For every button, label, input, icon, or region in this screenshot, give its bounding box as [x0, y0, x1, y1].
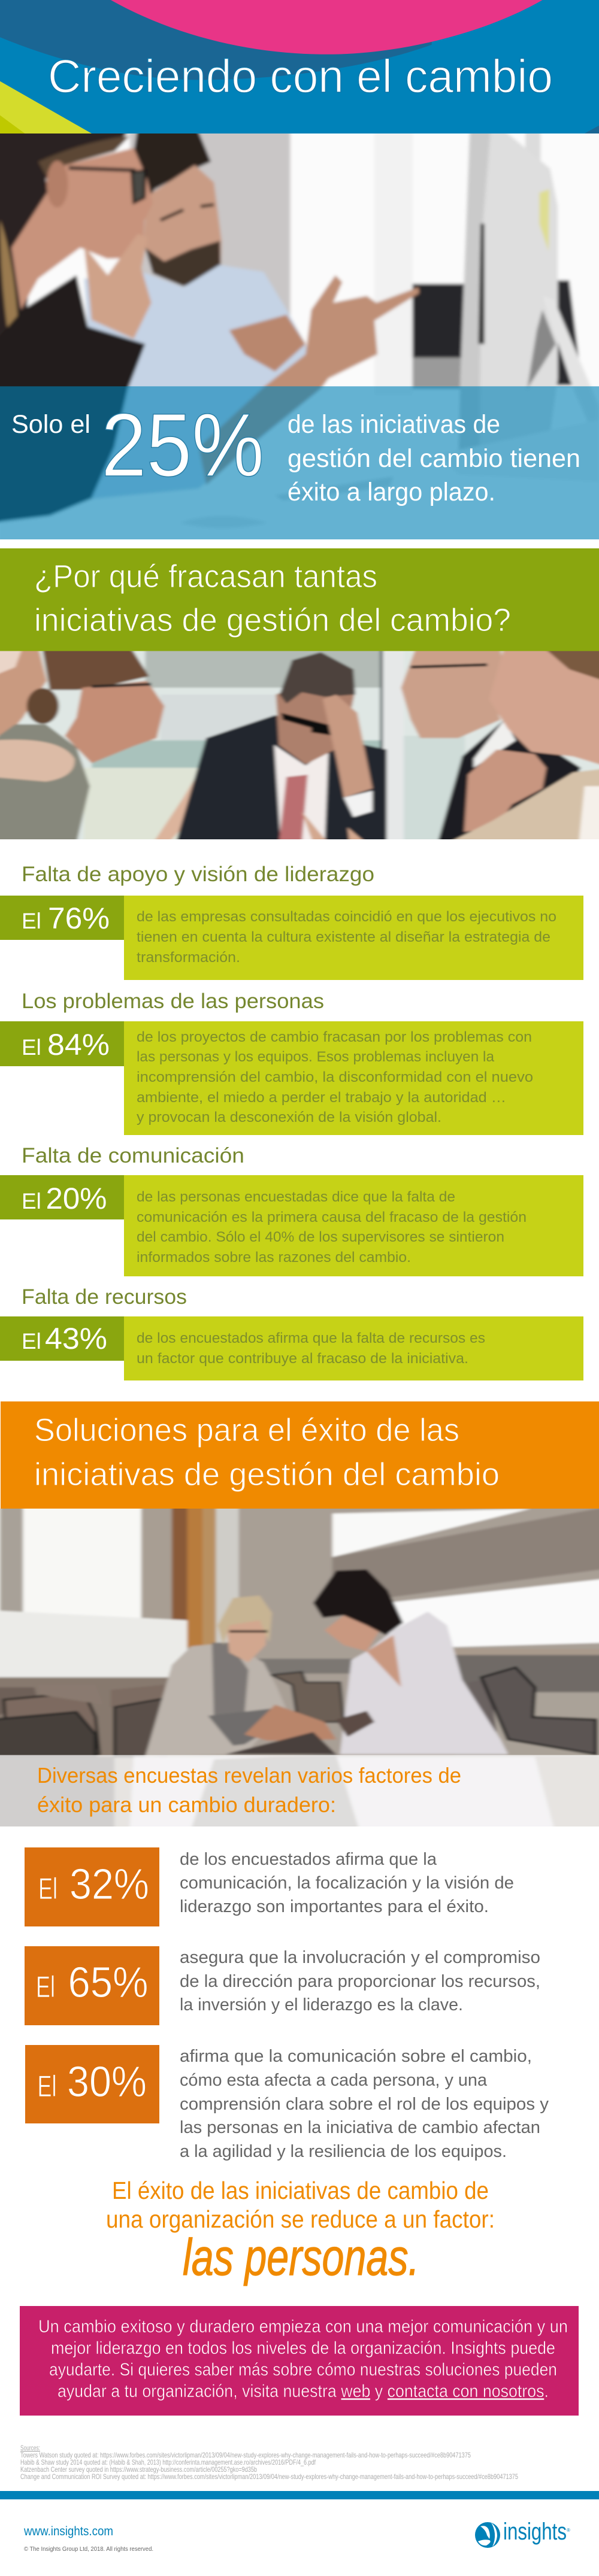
item: falta de comunicación: comunicación es la primera causa del fracaso de la gestión	[137, 1209, 527, 1225]
heading band: por qué fracasan: ¿Por qué fracasan tantas	[34, 559, 377, 594]
stat: 32%: de los encuestados afirma que la	[180, 1850, 437, 1869]
statistic: solo el 25%: de las iniciativas de	[288, 410, 500, 439]
conclusion statement	[106, 2177, 495, 2286]
item: problemas de las personas: de los proyectos de cambio fracasan por los problemas con	[137, 1029, 532, 1045]
item: falta de apoyo: tienen en cuenta la cultura existente al diseñar la estrategia de	[137, 929, 550, 945]
stat: 30%: comprensión clara sobre el rol de los equipos y	[180, 2095, 549, 2114]
item: falta de comunicación: de las personas encuestadas dice que la falta de	[137, 1189, 455, 1205]
stat: 30%	[25, 2045, 549, 2161]
item: falta de comunicación: El	[22, 1189, 41, 1213]
stat: 32%: liderazgo son importantes para el éxito.	[180, 1897, 489, 1916]
statistic: solo el 25%: éxito a largo plazo.	[288, 478, 495, 506]
footer website and copyright	[23, 2525, 153, 2553]
item: problemas de las personas: y provocan la desconexión de la visión global.	[137, 1109, 441, 1125]
item: falta de comunicación: 20%	[46, 1182, 107, 1215]
stat: 65%	[25, 1946, 540, 2025]
item: problemas de las personas: las personas y los equipos. Esos problemas incluyen la	[137, 1049, 495, 1065]
item: falta de comunicación: Falta de comunicación	[22, 1144, 244, 1167]
heading band: por qué fracasan: iniciativas de gestión del cambio?	[34, 602, 511, 638]
item: falta de apoyo: de las empresas consultadas coincidió en que los ejecutivos no	[137, 909, 556, 925]
item: falta de recursos: Falta de recursos	[22, 1285, 187, 1309]
stat: 65%: 65%	[68, 1959, 149, 2007]
footer website and copyright: © The Insights Group Ltd, 2018. All rights reserved.	[24, 2545, 153, 2553]
item: problemas de las personas: 84%	[47, 1028, 110, 1061]
item: falta de recursos	[0, 1285, 583, 1380]
photo: two women with a tablet in an auditorium	[0, 1504, 599, 1831]
stat: 65%: la inversión y el liderazgo es la clave.	[180, 1995, 463, 2014]
heading band: soluciones: Soluciones para el éxito de las	[34, 1412, 459, 1448]
call to action panel	[20, 2306, 579, 2416]
heading band: soluciones	[1, 1401, 599, 1509]
subheading over photo: Diversas encuestas revelan varios factores de	[37, 1763, 461, 1788]
sources	[20, 2444, 518, 2481]
item: falta de recursos: un factor que contribuye al fracaso de la iniciativa.	[137, 1351, 468, 1367]
item: falta de comunicación	[0, 1144, 583, 1276]
insights logo: insights	[503, 2519, 567, 2545]
stat: 30%: cómo esta afecta a cada persona, y una	[180, 2071, 488, 2090]
conclusion statement: una organización se reduce a un factor:	[106, 2205, 495, 2233]
handwritten emphasis: las personas.	[183, 2229, 419, 2286]
stat: 65%: asegura que la involucración y el compromiso	[180, 1948, 540, 1967]
photo: two colleagues at a monitor with statistic overlay	[0, 128, 599, 544]
sources: Sources:	[20, 2444, 40, 2452]
item: falta de recursos: El	[22, 1329, 41, 1354]
call to action panel: ayudar a tu organización, visita nuestra web y contacta con nosotros.	[58, 2381, 549, 2401]
stat: 32%: comunicación, la focalización y la visión de	[180, 1874, 514, 1893]
statistic: solo el 25%: gestión del cambio tienen	[288, 444, 580, 473]
call to action panel: mejor liderazgo en todos los niveles de la organización. Insights puede	[51, 2338, 555, 2358]
statistic: solo el 25%	[11, 395, 580, 506]
stat: 32%	[25, 1847, 514, 1926]
statistic: solo el 25%: Solo el	[11, 410, 90, 439]
heading band: por qué fracasan	[0, 548, 599, 651]
item: falta de apoyo: Falta de apoyo y visión de liderazgo	[22, 863, 374, 886]
sources: Katzenbach Center survey quoted in https://www.strategy-business.com/article/00255?gko=9d35b	[20, 2465, 257, 2474]
stat: 32%: El	[38, 1872, 58, 1906]
subheading over photo: éxito para un cambio duradero:	[37, 1792, 336, 1817]
stat: 30%: El	[37, 2070, 56, 2103]
stat: 32%: 32%	[69, 1861, 149, 1909]
photo: tense business meeting	[0, 647, 599, 844]
icon: logo swirl	[475, 2522, 500, 2548]
stat: 30%: afirma que la comunicación sobre el cambio,	[180, 2047, 532, 2066]
sources: Habib & Shaw study 2014 quoted at: (Habib & Shah, 2013) http://conferinta.management.ase.ro/archives/2016/PDF/4_6.pdf	[20, 2458, 316, 2466]
panel: causes of failure	[0, 863, 583, 1380]
item: problemas de las personas: incomprensión del cambio, la disconformidad con el nuevo	[137, 1069, 533, 1085]
item: falta de apoyo	[0, 863, 583, 980]
panel: success factors	[25, 1847, 549, 2161]
item: problemas de las personas	[0, 990, 583, 1135]
stat: 65%: de la dirección para proporcionar los recursos,	[180, 1972, 540, 1991]
insights logo	[475, 2519, 570, 2548]
item: falta de comunicación: del cambio. Sólo el 40% de los supervisores se sintieron	[137, 1229, 504, 1245]
subheading over photo	[37, 1763, 461, 1817]
item: falta de recursos: 43%	[45, 1322, 107, 1355]
heading band: soluciones: iniciativas de gestión del cambio	[34, 1457, 500, 1492]
item: falta de recursos: de los encuestados afirma que la falta de recursos es	[137, 1330, 485, 1346]
item: problemas de las personas: El	[22, 1035, 41, 1060]
footer bar	[0, 2491, 599, 2499]
header banner	[0, 0, 599, 133]
item: falta de apoyo: transformación.	[137, 949, 240, 966]
item: falta de apoyo: El	[22, 909, 41, 933]
footer website and copyright: www.insights.com	[23, 2525, 113, 2538]
title: Creciendo con el cambio	[48, 50, 553, 102]
item: falta de apoyo: 76%	[48, 902, 110, 935]
item: falta de comunicación: informados sobre las razones del cambio.	[137, 1249, 411, 1266]
conclusion statement: El éxito de las iniciativas de cambio de	[112, 2177, 489, 2204]
stat: 30%: a la agilidad y la resiliencia de los equipos.	[180, 2142, 507, 2161]
stat: 30%: las personas en la iniciativa de cambio afectan	[180, 2118, 540, 2137]
stat: 65%: El	[36, 1970, 55, 2004]
item: problemas de las personas: ambiente, el miedo a perder el trabajo y la autoridad …	[137, 1090, 506, 1106]
sources: Towers Watson study quoted at: https://www.forbes.com/sites/victorlipman/2013/09/04/new-study-explores-why-change-management-fails-and-how-to-perhaps-succeed/#ce8b90471375	[20, 2451, 471, 2459]
item: problemas de las personas: Los problemas de las personas	[22, 990, 324, 1013]
statistic: solo el 25%: 25%	[101, 395, 264, 495]
insights logo: ®	[567, 2528, 570, 2533]
stat: 30%: 30%	[67, 2058, 147, 2106]
